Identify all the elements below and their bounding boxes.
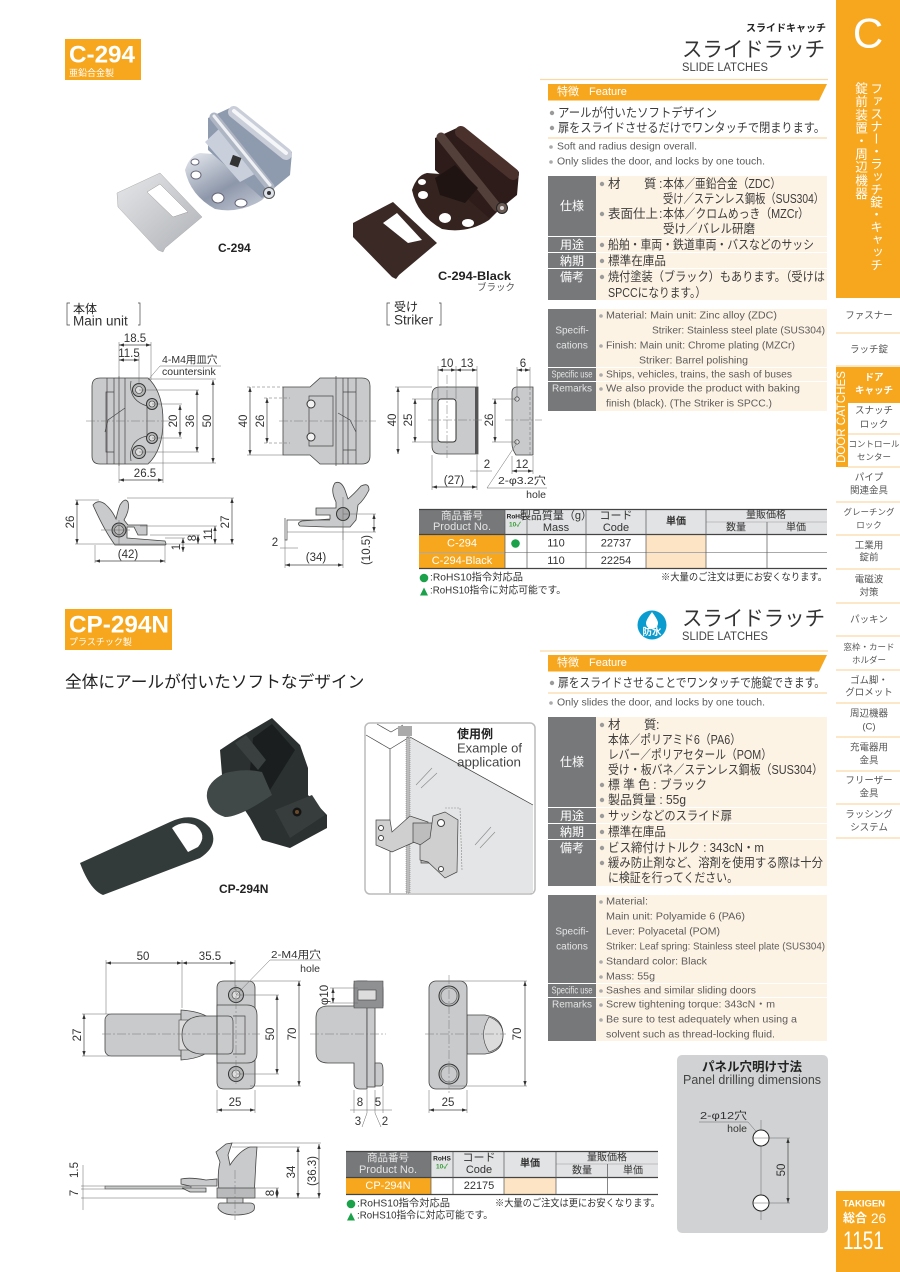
sidebar: category navigation: グレーチング [843,507,895,517]
panel: panel drilling dimensions: hole [727,1123,747,1135]
spec table JP: CP-294N: レバー／ポリアセタール（POM） [608,748,772,762]
drawing: CP-294N bottom view: (36.3) [307,1156,319,1186]
label: CP-294N: CP-294N [219,882,268,896]
sidebar: category navigation [836,310,900,838]
label: main unit: 本体 [73,302,97,316]
drawing: CP-294N side view: 5 [375,1097,381,1109]
spec table EN: C-294: Finish: Main unit: Chrome plating (MZCr) [606,340,795,352]
drawing: main unit back view [238,376,376,466]
drawing: main unit side view 2 [272,482,376,568]
drawing: main unit front view [86,333,221,483]
product table: C-294: 110 [547,538,565,550]
drawing: striker front view: 25 [403,414,415,426]
feature panel: C-294: Soft and radius design overall. [557,142,697,152]
label: main unit: Main unit [73,314,128,328]
spec table JP: CP-294N: 仕様 [560,755,584,769]
drawing: main unit front view: countersink [162,366,216,378]
drawing: CP-294N front view: 50 [265,1028,277,1040]
sidebar: category navigation: ラッチ錠 [850,344,888,356]
spec table JP: C-294: 受け／ステンレス鋼板（SUS304） [663,192,824,206]
label: main unit [67,302,140,328]
drawing: main unit side view: (42) [118,549,138,561]
spec table JP: C-294 [548,176,827,300]
sidebar: category navigation: コントロール [848,439,900,449]
drawing: main unit side view: 11 [203,528,215,540]
product table: CP-294N: CP-294N [365,1180,411,1192]
drawing: CP-294N side view: 3 [355,1116,361,1128]
product table: CP-294N: 22175 [464,1180,494,1192]
spec table EN: CP-294N: Material: [606,896,648,908]
chapter title vertical: 錠前装置・周辺機器 [853,82,867,200]
spec table EN: CP-294N [548,895,827,1041]
sidebar: category navigation: DOOR CATCHES [836,371,848,463]
label: striker: Striker [394,312,434,328]
sidebar: category navigation: 電磁波 [855,574,884,586]
rohs notes: CP-294N: ※大量のご注文は更にお安くなります。 [495,1196,660,1210]
product table: C-294: 商品番号 [441,509,483,522]
sidebar: category navigation: ロック [856,520,882,530]
spec table JP: C-294: 用途 [560,238,584,252]
sidebar: category navigation: スナッチ [855,406,893,416]
drawing: CP-294N side view: 8 [357,1097,363,1109]
spec table EN: C-294 [548,309,827,411]
product table: C-294: Mass [543,522,570,534]
product table: C-294: 単価 [666,514,686,528]
spec table EN: CP-294N: Striker: Leaf spring: Stainless steel plate (SUS304) [606,942,825,952]
spec table JP: CP-294N: 緩み防止剤など、溶剤を使用する際は十分 [608,855,823,870]
sidebar: category navigation: 金具 [859,754,879,766]
drawing: CP-294N bottom view: 7 [69,1190,81,1196]
spec table JP: CP-294N: 受け・板バネ／ステンレス鋼板（SUS304） [608,763,823,777]
drawing: main unit front view: 11.5 [118,348,140,360]
product table: C-294: 単価 [786,520,806,534]
feature panel: C-294: アールが付いたソフトデザイン [558,105,717,120]
spec table EN: CP-294N: Specific use [552,986,593,996]
spec table JP: CP-294N [548,717,827,886]
sidebar: category navigation: 金具 [859,788,879,800]
rohs notes: C-294: :RoHS10指令対応品 [430,570,523,584]
drawing: main unit front view: 20 [168,415,180,427]
sidebar: category navigation: グロメット [845,686,893,698]
product table: CP-294N: 10✓ [436,1164,448,1170]
product table: C-294: 量販価格 [746,508,786,521]
rohs notes: C-294: :RoHS10指令に対応可能です。 [430,584,566,596]
feature bar: Feature [589,86,627,98]
label: C-294-Black: ブラック [477,282,515,294]
drawing: CP-294N front view: 25 [229,1097,241,1109]
product table: C-294: Code [603,522,629,534]
spec table JP: CP-294N: 標 準 色 : ブラック [608,777,707,792]
sidebar: category navigation: 工業用 [855,540,883,552]
spec table EN: CP-294N: Main unit: Polyamide 6 (PA6) [606,912,745,922]
panel: panel drilling dimensions: 2-φ12穴 [700,1110,748,1122]
drawing: striker side view: 6 [520,358,526,370]
rohs notes: CP-294N [347,1196,660,1222]
chapter title vertical [853,82,882,271]
product table: CP-294N: RoHS [433,1156,452,1162]
spec table JP: C-294: 船舶・車両・鉄道車両・バスなどのサッシ [608,237,814,252]
spec table JP: C-294: : [659,177,662,191]
spec table EN: C-294: Specifi- [555,326,589,336]
rohs notes: C-294: ※大量のご注文は更にお安くなります。 [661,570,827,584]
product table: CP-294N: 商品番号 [367,1151,409,1164]
feature panel: C-294: Only slides the door, and locks by one touch. [557,156,765,168]
sidebar: category navigation: ゴム脚・ [850,674,888,686]
spec table JP: CP-294N: に検証を行ってください。 [608,871,738,885]
label: C-294-Black [438,269,515,294]
chapter title vertical: ファスナー・ラッチ錠・キャッチ [868,82,882,271]
drawing: striker front view: 40 [387,414,399,426]
icon: waterproof: 防水 [642,626,662,638]
product badge: CP-294N: CP-294N [69,612,169,638]
photo: C-294 chrome latch [117,107,292,252]
panel: example of application: 使用例 [457,726,493,741]
product badge: C-294: C-294 [69,42,136,68]
photo: CP-294N black latch [80,718,327,895]
drawing: CP-294N side view [310,981,392,1128]
product table: CP-294N: 量販価格 [587,1150,627,1164]
sidebar: category navigation: ファスナー [845,310,893,322]
spec table EN: CP-294N: Standard color: Black [606,956,708,968]
photo: C-294-Black latch [353,127,519,279]
sidebar: category navigation: 窓枠・カード [843,642,895,652]
sidebar: category navigation: 関連金具 [850,484,888,496]
sidebar: category navigation: 対策 [859,586,879,598]
drawing: CP-294N side view: φ10 [319,985,331,1005]
drawing: main unit side view: 27 [220,516,232,528]
spec table JP: C-294: 受け／バレル研磨 [663,222,755,236]
spec table JP: CP-294N: 製品質量 : 55g [608,792,686,807]
spec table EN: C-294: Specific use [552,370,593,380]
spec table EN: CP-294N: solvent such as thread-locking fluid. [606,1030,775,1040]
drawing: striker front view [387,358,492,490]
spec table EN: C-294: Striker: Stainless steel plate (SUS304) [652,326,825,336]
spec table EN: C-294: cations [556,340,588,352]
feature bar 2 [548,655,827,672]
drawing: main unit side view [65,498,234,563]
panel: example of application [365,723,535,894]
product table: C-294: Product No. [433,521,491,533]
sidebar: category navigation: パッキン [850,614,888,626]
drawing: main unit side view 2: (34) [306,552,326,564]
spec table EN: CP-294N: Lever: Polyacetal (POM) [606,926,720,938]
label: striker [387,300,441,328]
product table: CP-294N: Product No. [359,1164,417,1176]
spec table JP: C-294: 本体／亜鉛合金（ZDC） [663,177,781,191]
spec table JP: CP-294N: 標準在庫品 [608,824,666,839]
spec table JP: C-294: 仕様 [560,199,584,213]
product badge: CP-294N: プラスチック製 [69,636,132,647]
title: slide latches: スライドラッチ [682,38,825,62]
product table: C-294: 10✓ [509,522,521,528]
spec table EN: C-294: We also provide the product with baking [606,384,800,394]
spec table JP: C-294: 材 [608,177,621,191]
title: slide latches 2: スライドラッチ [682,608,825,630]
page number tab [836,1191,900,1272]
drawing: main unit side view: 1 [171,544,183,550]
page number tab: 総合 [843,1210,867,1225]
panel: example of application: Example of [457,740,522,756]
drawing: CP-294N side view: 2 [382,1116,388,1128]
drawing: main unit front view: 50 [202,415,214,427]
rohs notes: CP-294N: :RoHS10指令に対応可能です。 [357,1208,493,1222]
drawing: CP-294N bottom view: 8 [265,1190,277,1196]
product table: CP-294N: 単価 [520,1156,540,1170]
sidebar: category navigation: ドア [864,372,884,384]
drawing: striker side view: 26 [484,414,496,426]
spec table EN: CP-294N: Screw tightening torque: 343cN・m [606,1000,775,1010]
title: slide latches 2: SLIDE LATCHES [682,631,768,643]
drawing: main unit back view: 40 [238,415,250,427]
drawing: striker front view: (27) [444,475,464,487]
panel: panel drilling dimensions: Panel drilling dimensions [683,1073,821,1087]
spec table JP: CP-294N: ビス締付けトルク : 343cN・m [608,841,764,855]
drawing: striker front view: 2 [484,459,490,471]
spec table JP: C-294: 焼付塗装（ブラック）もあります。（受けは [608,269,825,284]
drawing: CP-294N back view [425,975,527,1113]
rohs notes: CP-294N: :RoHS10指令対応品 [357,1196,450,1210]
sidebar: category navigation: フリーザー [845,776,893,786]
panel: example of application: application [457,754,521,770]
page number tab: 1151 [843,1227,884,1255]
spec table JP: C-294: 標準在庫品 [608,253,666,268]
product table: CP-294N: 数量 [572,1164,592,1176]
spec table EN: CP-294N: Specifi- [555,926,589,938]
drawing: CP-294N bottom view [69,1143,321,1220]
spec table JP: CP-294N: サッシなどのスライド扉 [608,809,732,823]
spec table EN: CP-294N: Remarks [552,1000,592,1010]
product table: C-294: C-294 [447,538,477,550]
sidebar: category navigation: ロック [860,420,888,430]
drawing: CP-294N front view: 27 [72,1029,84,1041]
drawing: CP-294N back view: 70 [512,1028,524,1040]
spec table EN: C-294: Striker: Barrel polishing [639,356,748,366]
heading: soft design: 全体にアールが付いたソフトなデザイン [65,672,364,692]
label: C-294-Black: C-294-Black [438,269,511,283]
product table: CP-294N: 単価 [623,1164,643,1176]
drawing: striker side view: 12 [516,459,528,471]
product table: C-294: C-294-Black [432,555,493,567]
title: slide latches [682,22,826,74]
spec table JP: CP-294N: 材 [608,718,621,732]
spec table EN: CP-294N: Sashes and similar sliding doors [606,986,756,996]
spec table EN: C-294: finish (black). (The Striker is SPCC.) [606,398,772,410]
sidebar: category navigation: 錠前 [859,552,879,564]
drawing: CP-294N front view: hole [300,963,320,975]
label: C-294: C-294 [218,241,251,255]
feature bar [548,84,827,100]
drawing: main unit front view: 18.5 [124,333,146,345]
spec table JP: C-294: 本体／クロムめっき（MZCr） [663,207,809,221]
product table: C-294 [419,508,827,568]
sidebar: chapter tab [836,0,900,298]
drawing: CP-294N back view: 25 [442,1097,454,1109]
feature bar 2: Feature [589,657,627,669]
spec table JP: CP-294N: : [656,718,659,732]
spec table JP: CP-294N: 納期 [560,824,584,839]
drawing: CP-294N front view: 50 [137,951,149,963]
drawing: CP-294N bottom view: 1.5 [69,1162,81,1178]
spec table JP: C-294: 表面仕上 [608,207,658,221]
label: striker: 受け [394,300,418,314]
rohs notes: C-294 [420,570,827,596]
title: slide latches 2 [682,608,825,643]
spec table EN: CP-294N: Be sure to test adequately when using a [606,1014,797,1026]
chapter letter: C [853,10,883,56]
sidebar: category navigation: センター [857,452,891,462]
panel: panel drilling dimensions: パネル穴明け寸法 [702,1059,802,1074]
sidebar: category navigation: 充電器用 [850,742,888,754]
drawing: CP-294N bottom view: 34 [286,1165,298,1178]
spec table JP: C-294: 納期 [560,253,584,268]
product table: CP-294N: コード [462,1152,496,1164]
drawing: striker front view: 10 [441,358,453,370]
drawing: main unit back view: 26 [255,415,267,427]
product table: CP-294N: Code [466,1164,492,1176]
spec table JP: CP-294N: 本体／ポリアミド6（PA6） [608,733,741,747]
drawing: CP-294N front view [72,949,322,1113]
icon: waterproof [638,610,666,640]
spec table JP: CP-294N: 質 [644,717,657,732]
sidebar: category navigation: ホルダー [852,655,886,665]
sidebar: category navigation: システム [850,822,888,834]
sidebar: category navigation: 周辺機器 [850,708,888,720]
sidebar: category navigation: パイプ [855,472,884,484]
page number tab: 26 [871,1210,886,1226]
spec table EN: CP-294N: cations [556,942,588,952]
sidebar: category navigation: (C) [862,722,876,732]
product badge: C-294: 亜鉛合金製 [69,67,114,78]
product table: C-294: コード [600,510,632,522]
product table: C-294: 110 [547,555,565,567]
spec table JP: C-294: SPCCになります。） [608,286,706,300]
spec table EN: C-294: Material: Main unit: Zinc alloy (ZDC) [606,310,777,322]
drawing: main unit side view: 26 [65,516,77,528]
drawing: CP-294N front view: 2-M4用穴 [271,949,322,961]
spec table JP: CP-294N: 備考 [560,841,584,855]
drawing: main unit side view 2: (10.5) [361,535,373,565]
spec table JP: C-294: : [659,207,662,221]
product table: C-294: 数量 [726,520,746,534]
product table: C-294: 22737 [601,538,631,550]
page number tab: TAKIGEN [843,1198,885,1210]
drawing: main unit side view: 8 [187,535,199,541]
drawing: CP-294N front view: 35.5 [199,951,221,963]
drawing: striker side view [484,358,547,501]
product badge: CP-294N [65,609,172,650]
spec table EN: CP-294N: Mass: 55g [606,972,655,982]
sidebar: category navigation: ラッシング [845,808,893,820]
product table: C-294: 製品質量（g） [520,508,592,522]
feature panel: CP-294N: Only slides the door, and locks by one touch. [557,698,765,708]
product table: CP-294N [346,1150,658,1194]
drawing: main unit front view: 4-M4用皿穴 [162,354,218,366]
feature panel: C-294: 扉をスライドさせるだけでワンタッチで閉まります。 [558,121,825,135]
drawing: main unit front view: 26.5 [134,468,156,480]
drawing: striker side view: 2-φ3.2穴 [498,475,547,487]
spec table JP: C-294: 質 [644,176,657,191]
product table: C-294: 22254 [601,555,631,567]
spec table JP: C-294: 備考 [560,270,584,284]
product table: C-294: RoHS [507,514,525,520]
spec table EN: C-294: Ships, vehicles, trains, the sash of buses [606,370,792,380]
panel: panel drilling dimensions [677,1055,828,1233]
drawing: main unit side view 2: 2 [272,537,278,549]
spec table JP: CP-294N: 用途 [560,809,584,823]
drawing: CP-294N front view: 70 [287,1028,299,1040]
sidebar: category navigation: キャッチ [855,386,893,396]
spec table EN: C-294: Remarks [552,384,592,394]
feature panel: CP-294N: 扉をスライドさせることでワンタッチで施錠できます。 [558,676,825,690]
drawing: striker front view: 13 [461,358,473,370]
feature panel: CP-294N [540,651,828,708]
product badge: C-294 [65,39,141,80]
panel: panel drilling dimensions: 50 [776,1164,788,1176]
title: slide latches: スライドキャッチ [746,22,826,34]
drawing: striker side view: hole [526,489,546,501]
feature panel: C-294 [540,80,828,168]
drawing: main unit front view: 36 [185,415,197,427]
title: slide latches: SLIDE LATCHES [682,62,768,74]
feature bar: 特徴 [557,84,579,98]
feature bar 2: 特徴 [557,655,579,669]
